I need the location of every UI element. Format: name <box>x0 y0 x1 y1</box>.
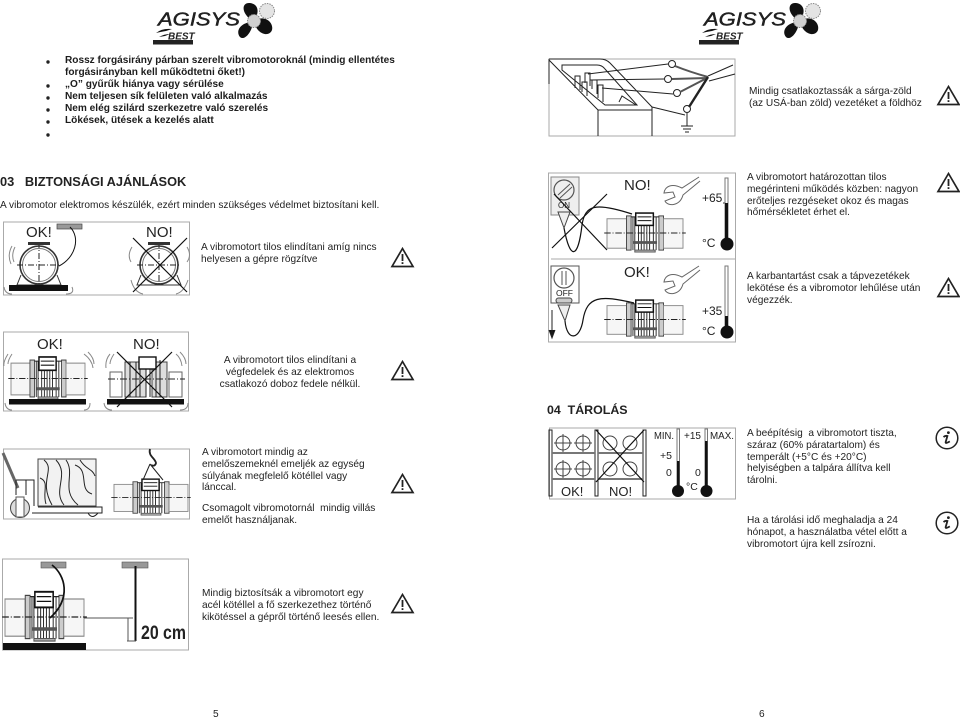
diagram: hot and cooled motor: OK! <box>624 264 650 281</box>
diagram: safety cable 20 cm: 20 cm <box>141 623 186 644</box>
text: storage <box>747 428 897 486</box>
text: storage: tárolni. <box>747 475 777 486</box>
diagram: storage OK and NO: MAX. <box>710 431 734 442</box>
diagram: storage OK and NO: +5 <box>660 450 672 462</box>
bullet markers <box>46 60 50 137</box>
logo: AGISYS right: BEST <box>716 32 744 42</box>
diagram: OK and NO mounting: OK! <box>26 224 52 241</box>
icon: warning lifting <box>392 474 413 492</box>
text: covers: végfedelek és az elektromos <box>226 367 354 378</box>
bullet list <box>65 55 395 126</box>
logo: AGISYS right <box>699 3 820 45</box>
bullet list: Lökések, ütések a kezelés alatt <box>65 115 214 126</box>
text: mounting: helyesen a gépre rögzítve <box>201 254 318 265</box>
text: covers: csatlakozó doboz fedele nélkül. <box>220 379 360 390</box>
text: no touching: A vibromotort határozottan tilos <box>747 172 887 183</box>
icon: warning ground <box>938 86 959 104</box>
icon: warning safety cable <box>392 594 413 612</box>
diagram: grounding connection <box>549 59 735 136</box>
diagram: hot and cooled motor: NO! <box>624 177 651 194</box>
text: maintenance <box>747 271 920 306</box>
diagram: storage OK and NO: NO! <box>609 484 632 499</box>
text: greasing: vibromotort újra kell zsírozni. <box>747 539 876 550</box>
diagram: end covers OK and NO: OK! <box>37 336 63 353</box>
diagram: hot and cooled motor <box>548 173 736 342</box>
text: safety cable: Mindig biztosítsák a vibromotort egy <box>202 588 364 599</box>
text: mounting: A vibromotort tilos elindítani amíg nincs <box>201 242 377 253</box>
text: lifting <box>202 447 365 493</box>
diagram: OK and NO mounting: NO! <box>146 224 173 241</box>
logo: AGISYS left: BEST <box>168 32 196 42</box>
diagram: forklift and lifting hook <box>3 449 191 519</box>
text: grounding: (az USÁ-ban zöld) vezetéket a földhöz <box>749 98 922 109</box>
text: forklift: emelőt használjanak. <box>202 515 297 526</box>
heading: section 03: 03 BIZTONSÁGI AJÁNLÁSOK <box>0 174 186 189</box>
text: no touching <box>747 172 918 218</box>
icon: warning covers <box>392 362 413 380</box>
diagram: end covers OK and NO <box>4 332 188 411</box>
bullet list: forgásirányban kell működtetni őket!) <box>65 67 245 78</box>
text: no touching: erőteljes rezgéseket okoz és magas <box>747 196 909 207</box>
diagram: storage OK and NO: 0 <box>666 467 672 479</box>
text: greasing <box>747 515 907 550</box>
text: safety cable: kikötéssel a gépről történő leesés ellen. <box>202 612 379 623</box>
page number 5: 5 <box>213 709 219 720</box>
logo: AGISYS right: AGISYS <box>703 8 787 30</box>
text: lifting: emelőszemeknél emeljék az egység <box>202 459 365 470</box>
text: grounding: Mindig csatlakoztassák a sárga-zöld <box>749 86 912 97</box>
diagram: safety cable 20 cm <box>2 559 188 650</box>
text: lifting: súlyának megfelelő kötéllel vagy <box>202 471 347 482</box>
diagram: end covers OK and NO: NO! <box>133 336 160 353</box>
text: no touching: megérinteni működés közben: nagyon <box>747 184 918 195</box>
text: lifting: A vibromotort mindig az <box>202 447 308 458</box>
bullet list: Rossz forgásirány párban szerelt vibromotoroknál (mindig ellentétes <box>65 55 395 66</box>
diagram: hot and cooled motor: °C <box>702 324 716 338</box>
diagram: storage OK and NO: °C <box>686 481 698 493</box>
text: storage: temperált (+5°C és +20°C) <box>747 452 867 463</box>
text: safety cable <box>202 588 379 623</box>
logo: AGISYS left <box>153 3 274 45</box>
diagram: hot and cooled motor: °C <box>702 236 716 250</box>
text: greasing: Ha a tárolási idő meghaladja a 24 <box>747 515 898 526</box>
heading: section 04: 04 TÁROLÁS <box>547 403 628 417</box>
text: storage: helyiségben a talpára állítva kell <box>747 463 891 474</box>
text: mounting <box>201 242 377 265</box>
page number 6: 6 <box>759 709 765 720</box>
diagram: hot and cooled motor: ON <box>558 201 570 210</box>
text: lifting: lánccal. <box>202 482 236 493</box>
diagram: hot and cooled motor: +65 <box>702 191 723 205</box>
text: maintenance: végezzék. <box>747 295 793 306</box>
text: covers <box>220 355 360 390</box>
bullet list: „O” gyűrűk hiánya vagy sérülése <box>65 79 224 90</box>
text: covers: A vibromotort tilos elindítani a <box>224 355 356 366</box>
bullet list: Nem elég szilárd szerkezetre való szerelés <box>65 103 268 114</box>
text: intro: A vibromotor elektromos készülék, ezért minden szükséges védelmet biztosítani kell. <box>0 200 379 211</box>
text: storage: száraz (60% páratartalom) és <box>747 440 880 451</box>
icon: warning maintenance <box>938 278 959 296</box>
diagram: hot and cooled motor: +35 <box>702 304 723 318</box>
text: greasing: hónapot, a használatba vétel előtt a <box>747 527 907 538</box>
text: maintenance: lekötése és a vibromotor lehűlése után <box>747 283 920 294</box>
diagram: hot and cooled motor: OFF <box>556 288 573 298</box>
diagram: storage OK and NO <box>549 428 736 499</box>
text: no touching: hőmérsékletet érhet el. <box>747 207 850 218</box>
icon: info storage <box>936 427 958 449</box>
text: forklift: Csomagolt vibromotornál mindig villás <box>202 503 375 514</box>
diagram: OK and NO mounting <box>4 222 190 295</box>
diagram: storage OK and NO: 0 <box>695 467 701 479</box>
text: storage: A beépítésig a vibromotort tiszta, <box>747 428 897 439</box>
diagram: storage OK and NO: +15 <box>684 431 701 442</box>
icon: warning mounting <box>392 248 413 266</box>
text: forklift <box>202 503 375 526</box>
icon: info greasing <box>936 512 958 534</box>
logo: AGISYS left: AGISYS <box>157 8 241 30</box>
bullet list: Nem teljesen sík felületen való alkalmazás <box>65 91 268 102</box>
text: safety cable: acél kötéllel a fő szerkezethez történő <box>202 600 371 611</box>
text: grounding <box>749 86 922 109</box>
text: maintenance: A karbantartást csak a tápvezetékek <box>747 271 910 282</box>
icon: warning touch <box>938 174 959 192</box>
diagram: storage OK and NO: OK! <box>561 484 583 499</box>
diagram: storage OK and NO: MIN. <box>654 431 674 442</box>
